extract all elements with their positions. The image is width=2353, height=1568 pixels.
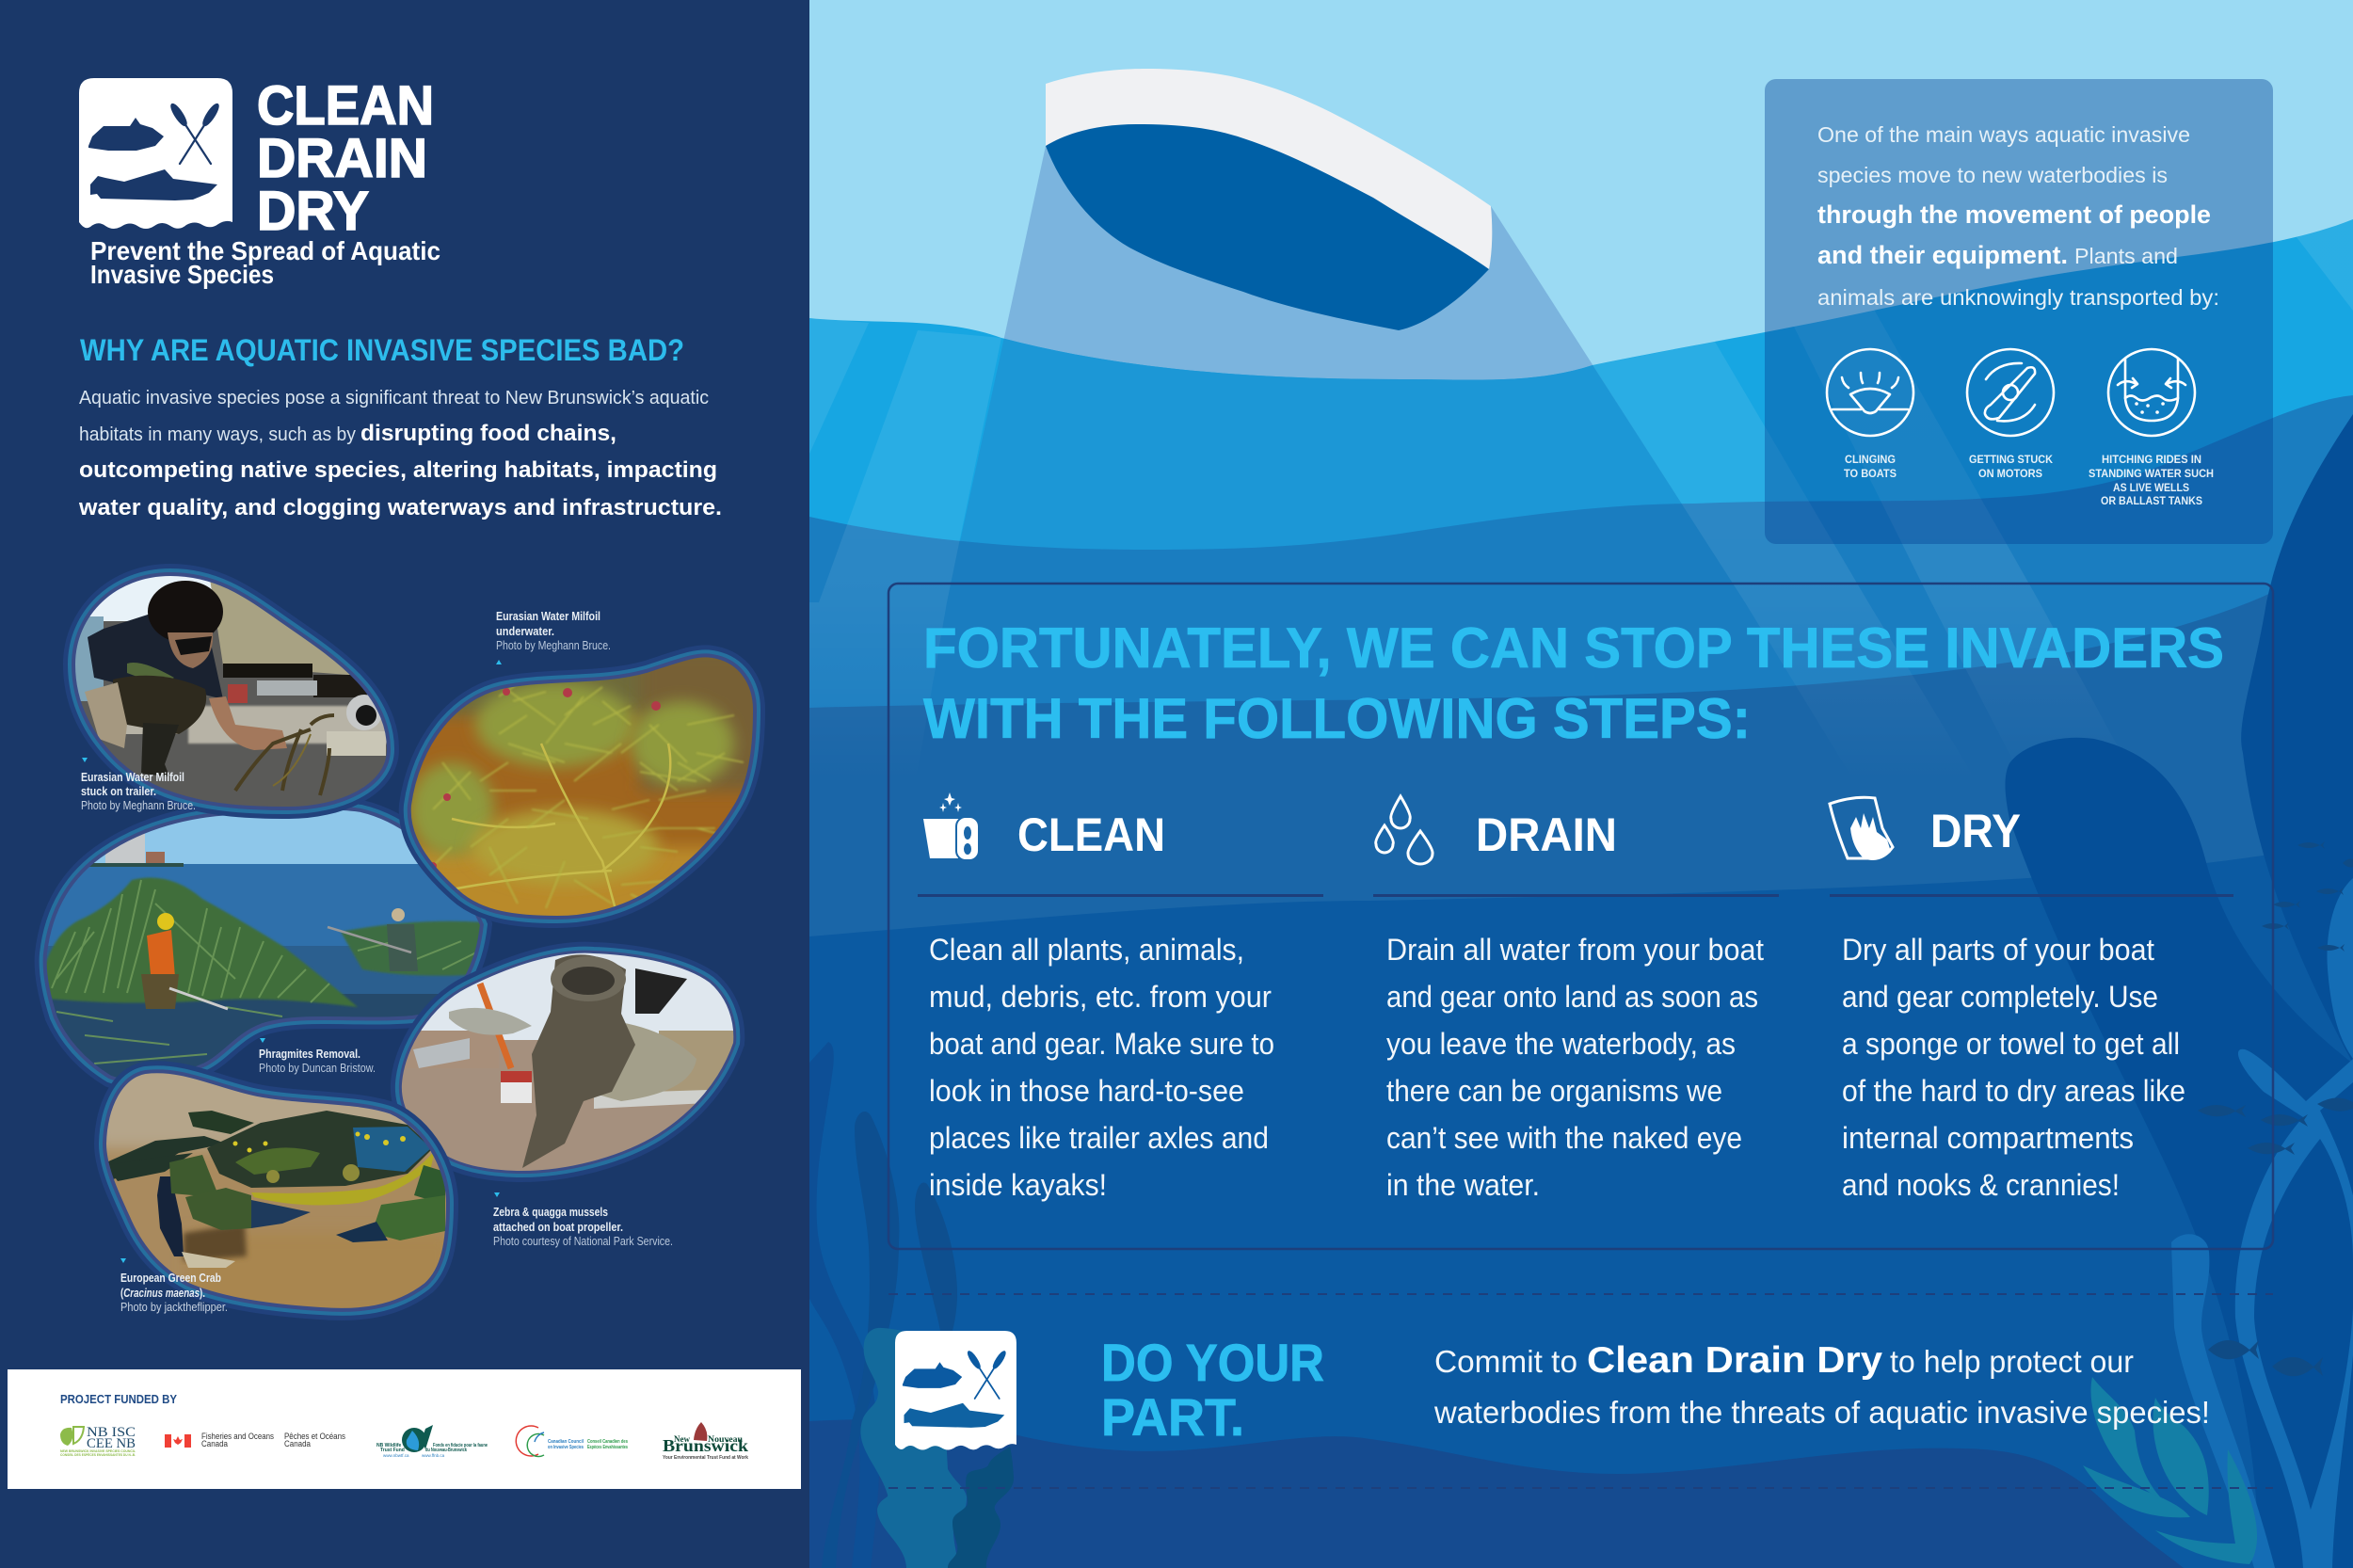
boat hull illustration <box>1046 69 1492 330</box>
intro text <box>1817 122 2219 310</box>
commitment text: to help protect our <box>1890 1344 2134 1379</box>
icon labels: GETTING STUCK <box>1969 455 2054 466</box>
do your part heading: DO YOUR <box>1101 1333 1324 1392</box>
logo: NB Wildlife Trust Fund: www.nbwtf.ca <box>383 1453 409 1458</box>
drain text: in the water. <box>1386 1168 1540 1202</box>
icon labels: ON MOTORS <box>1978 469 2042 480</box>
logo wordmark <box>257 75 434 242</box>
logo: Canadian Council on Invasive Species: Conseil Canadien des <box>587 1439 628 1445</box>
logo wordmark: CLEAN <box>257 75 434 136</box>
caption: milfoil on trailer <box>81 758 196 812</box>
intro text: Plants and <box>2074 244 2178 268</box>
icon labels <box>1844 455 2214 507</box>
icon labels: HITCHING RIDES IN <box>2102 455 2201 466</box>
dry text <box>1842 933 2185 1202</box>
icon labels: CLINGING <box>1845 455 1896 466</box>
paragraph: threat: habitats in many ways, such as by <box>79 424 357 445</box>
logo: Fisheries and Oceans Canada: Canada <box>201 1439 228 1448</box>
logo: New Brunswick <box>663 1422 748 1461</box>
caption: milfoil on trailer: Photo by Meghann Bruce. <box>81 799 196 812</box>
commitment text: waterbodies from the threats of aquatic invasive species! <box>1433 1395 2210 1430</box>
clean text: look in those hard-to-see <box>929 1074 1244 1108</box>
seaweed left <box>809 1042 1014 1568</box>
dry text: Dry all parts of your boat <box>1842 933 2154 967</box>
caption: milfoil underwater <box>496 610 611 664</box>
tagline <box>90 236 440 289</box>
icon labels: OR BALLAST TANKS <box>2101 496 2202 507</box>
icon: standing water <box>2108 349 2195 436</box>
caption: milfoil underwater: Eurasian Water Milfoil <box>496 610 600 623</box>
commitment text: Commit to <box>1434 1344 1577 1379</box>
funders bar <box>8 1369 801 1489</box>
logo: Canadian Council on Invasive Species <box>516 1426 628 1457</box>
logo: NB Wildlife Trust Fund: Fonds en fiducie pour la faune <box>433 1443 488 1448</box>
logo: NB Wildlife Trust Fund: du Nouveau-Brunswick <box>425 1448 467 1453</box>
logo: Canadian Council on Invasive Species: on Invasive Species <box>548 1445 584 1450</box>
clean text: Clean all plants, animals, <box>929 933 1244 967</box>
logo: NB ISC: NB ISC <box>87 1425 136 1440</box>
paragraph: threat: outcompeting native species, altering habitats, impacting <box>79 457 717 483</box>
call to action: do your part <box>895 1331 2210 1450</box>
column: drain <box>1373 796 1779 1202</box>
logo: New Brunswick: New <box>674 1434 690 1444</box>
caption: phragmites: Photo by Duncan Bristow. <box>259 1062 376 1075</box>
logo: NB Wildlife Trust Fund: Trust Fund <box>380 1448 405 1453</box>
caption: milfoil on trailer: Eurasian Water Milfoil <box>81 771 184 784</box>
caption: milfoil underwater: underwater. <box>496 625 554 638</box>
dry text: internal compartments <box>1842 1121 2134 1155</box>
caption: milfoil on trailer: stuck on trailer. <box>81 785 156 798</box>
drain text <box>1386 933 1764 1202</box>
logo wordmark: DRAIN <box>257 128 427 189</box>
dry text: a sponge or towel to get all <box>1842 1027 2180 1061</box>
drain text: there can be organisms we <box>1386 1074 1722 1108</box>
paragraph: threat: water quality, and clogging waterways and infrastructure. <box>78 495 722 520</box>
logo: Fisheries and Oceans Canada: Fisheries and Oceans <box>201 1432 274 1441</box>
icon labels: TO BOATS <box>1844 469 1897 480</box>
small logo <box>895 1331 1016 1450</box>
logo: NB ISC <box>60 1425 136 1457</box>
logo: New Brunswick: Brunswick <box>663 1436 748 1455</box>
dry title: DRY <box>1930 805 2021 857</box>
intro text: and their equipment. <box>1817 241 2068 269</box>
caption: milfoil underwater: Photo by Meghann Bruce. <box>496 639 611 652</box>
funders label: PROJECT FUNDED BY <box>60 1393 178 1406</box>
dry text: and gear completely. Use <box>1842 980 2158 1014</box>
intro text: through the movement of people <box>1817 200 2211 229</box>
logo: New Brunswick: Your Environmental Trust Fund at Work <box>663 1455 748 1461</box>
steps heading: WITH THE FOLLOWING STEPS: <box>923 687 1751 750</box>
logo: NB ISC: NEW BRUNSWICK INVASIVE SPECIES COUNCIL <box>60 1448 136 1453</box>
column: dry <box>1830 797 2233 1202</box>
steps heading: FORTUNATELY, WE CAN STOP THESE INVADERS <box>923 616 2224 680</box>
logo: Canadian Council on Invasive Species: Canadian Council <box>548 1439 584 1445</box>
steps heading <box>923 616 2224 750</box>
intro text: One of the main ways aquatic invasive <box>1817 122 2190 147</box>
commitment text: Clean Drain Dry <box>1587 1340 1882 1381</box>
caption: crab: Photo by jacktheflipper. <box>120 1301 228 1314</box>
caption: phragmites <box>259 1038 376 1075</box>
teal leaves <box>2083 1377 2257 1564</box>
caption: mussels: Photo courtesy of National Park Service. <box>493 1235 673 1248</box>
panel: steps <box>888 584 2273 1249</box>
logo: NB Wildlife Trust Fund <box>376 1425 488 1458</box>
tagline: Prevent the Spread of Aquatic <box>90 236 440 265</box>
caption: crab: European Green Crab <box>120 1272 221 1285</box>
icon: clinging to boats <box>1827 349 1913 436</box>
logo: Fisheries and Oceans Canada: Pêches et Océans <box>284 1432 345 1441</box>
info panel: how species move <box>1765 79 2273 544</box>
do your part heading: PART. <box>1101 1387 1244 1447</box>
logo wordmark: DRY <box>257 181 369 242</box>
photo: milfoil underwater <box>395 649 772 932</box>
logo: Fisheries and Oceans Canada <box>165 1432 345 1448</box>
clean text: boat and gear. Make sure to <box>929 1027 1274 1061</box>
caption: mussels: Zebra & quagga mussels <box>493 1206 608 1219</box>
heading: why bad: WHY ARE AQUATIC INVASIVE SPECIES BAD? <box>80 333 684 367</box>
dry text: of the hard to dry areas like <box>1842 1074 2185 1108</box>
logo: New Brunswick: Nouveau <box>708 1434 743 1444</box>
logo: NB ISC: CONSEIL DES ESPÈCES ENVAHISSANTES DU N.-B. <box>60 1452 136 1457</box>
clean text: places like trailer axles and <box>929 1121 1269 1155</box>
drain text: you leave the waterbody, as <box>1386 1027 1736 1061</box>
caption: crab <box>120 1258 228 1314</box>
paragraph: threat: Aquatic invasive species pose a significant threat to New Brunswick’s aquatic <box>79 387 709 408</box>
icon: stuck on motors <box>1967 349 2054 436</box>
fish <box>2198 841 2353 1376</box>
icon: hand and towel <box>1830 797 1893 859</box>
caption: phragmites: Phragmites Removal. <box>259 1048 360 1061</box>
logo: NB Wildlife Trust Fund: NB Wildlife <box>376 1443 402 1448</box>
drain text: and gear onto land as soon as <box>1386 980 1758 1014</box>
photo: phragmites removal <box>28 800 499 1097</box>
photo: milfoil on trailer <box>56 565 405 819</box>
photo: mussels on propeller <box>386 941 753 1186</box>
caption: mussels <box>493 1192 673 1248</box>
logo: Clean Drain Dry <box>79 78 232 229</box>
caption: crab: (Cracinus maenas). <box>120 1287 205 1300</box>
logo: NB Wildlife Trust Fund: www.ffnb.ca <box>422 1453 445 1458</box>
icon labels: STANDING WATER SUCH <box>2089 469 2214 480</box>
tagline: Invasive Species <box>90 260 274 289</box>
left navy panel background <box>0 0 809 1568</box>
icon: bucket and sponge <box>923 792 979 860</box>
clean text: inside kayaks! <box>929 1168 1107 1202</box>
paragraph: threat: disrupting food chains, <box>360 421 616 446</box>
icon: water drops <box>1376 796 1433 864</box>
logo: Canadian Council on Invasive Species: Espèces Envahissantes <box>587 1445 628 1450</box>
drain text: Drain all water from your boat <box>1386 933 1764 967</box>
logo: Fisheries and Oceans Canada: Canada <box>284 1439 311 1448</box>
seaweed right <box>2171 878 2353 1568</box>
right illustrated water background <box>809 0 2353 1568</box>
logo: NB ISC: CEE NB <box>87 1436 136 1451</box>
commitment text <box>1433 1340 2210 1430</box>
clean text <box>929 933 1274 1202</box>
dry text: and nooks & crannies! <box>1842 1168 2120 1202</box>
drain title: DRAIN <box>1476 808 1617 861</box>
clean title: CLEAN <box>1017 808 1165 861</box>
intro text: species move to new waterbodies is <box>1817 163 2168 187</box>
drain text: can’t see with the naked eye <box>1386 1121 1742 1155</box>
column: clean <box>918 792 1323 1202</box>
do your part heading <box>1101 1333 1324 1447</box>
paragraph: threat <box>78 387 722 520</box>
clean text: mud, debris, etc. from your <box>929 980 1272 1014</box>
icon labels: AS LIVE WELLS <box>2113 483 2189 494</box>
photo: european green crab <box>94 1064 461 1318</box>
intro text: animals are unknowingly transported by: <box>1817 285 2219 310</box>
caption: mussels: attached on boat propeller. <box>493 1221 623 1234</box>
